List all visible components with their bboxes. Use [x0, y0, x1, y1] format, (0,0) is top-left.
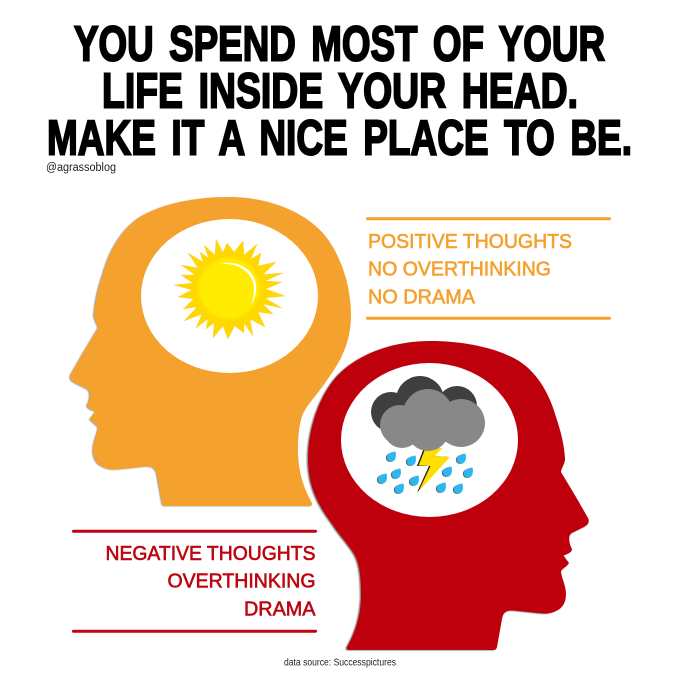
positive text: NO OVERTHINKING	[368, 259, 551, 281]
author handle: @agrassoblog	[46, 162, 116, 174]
bolt shadow	[417, 448, 449, 492]
icon: rain drops	[378, 452, 473, 494]
orange head silhouette	[70, 197, 351, 506]
front cloud	[380, 389, 485, 451]
red head with storm	[308, 341, 589, 650]
back cloud	[371, 376, 477, 432]
sun outer disc	[197, 256, 261, 320]
white thought bubble (orange head)	[141, 219, 318, 373]
orange bottom rule	[366, 317, 611, 320]
positive callout	[366, 217, 611, 320]
sun rays	[174, 239, 285, 339]
orange top rule	[366, 217, 611, 220]
positive text: NO DRAMA	[368, 286, 476, 308]
red head silhouette	[308, 341, 589, 650]
negative text	[106, 543, 316, 621]
negative callout	[72, 530, 317, 633]
sun highlight	[220, 263, 256, 305]
icon: lightning bolt	[417, 448, 450, 492]
sun core	[200, 259, 258, 318]
red bottom rule	[72, 630, 317, 633]
positive text	[368, 231, 572, 308]
orange head with sun	[70, 197, 351, 506]
positive text: POSITIVE THOUGHTS	[368, 231, 572, 253]
negative text: DRAMA	[244, 599, 316, 621]
data source: data source: Successpictures	[284, 658, 396, 668]
icon: sun	[174, 239, 285, 339]
negative text: OVERTHINKING	[168, 571, 316, 593]
icon: storm cloud	[371, 376, 485, 451]
negative text: NEGATIVE THOUGHTS	[106, 543, 316, 565]
red top rule	[72, 530, 317, 533]
bolt	[418, 448, 450, 492]
white thought bubble (red head)	[341, 363, 518, 517]
title	[47, 18, 632, 166]
